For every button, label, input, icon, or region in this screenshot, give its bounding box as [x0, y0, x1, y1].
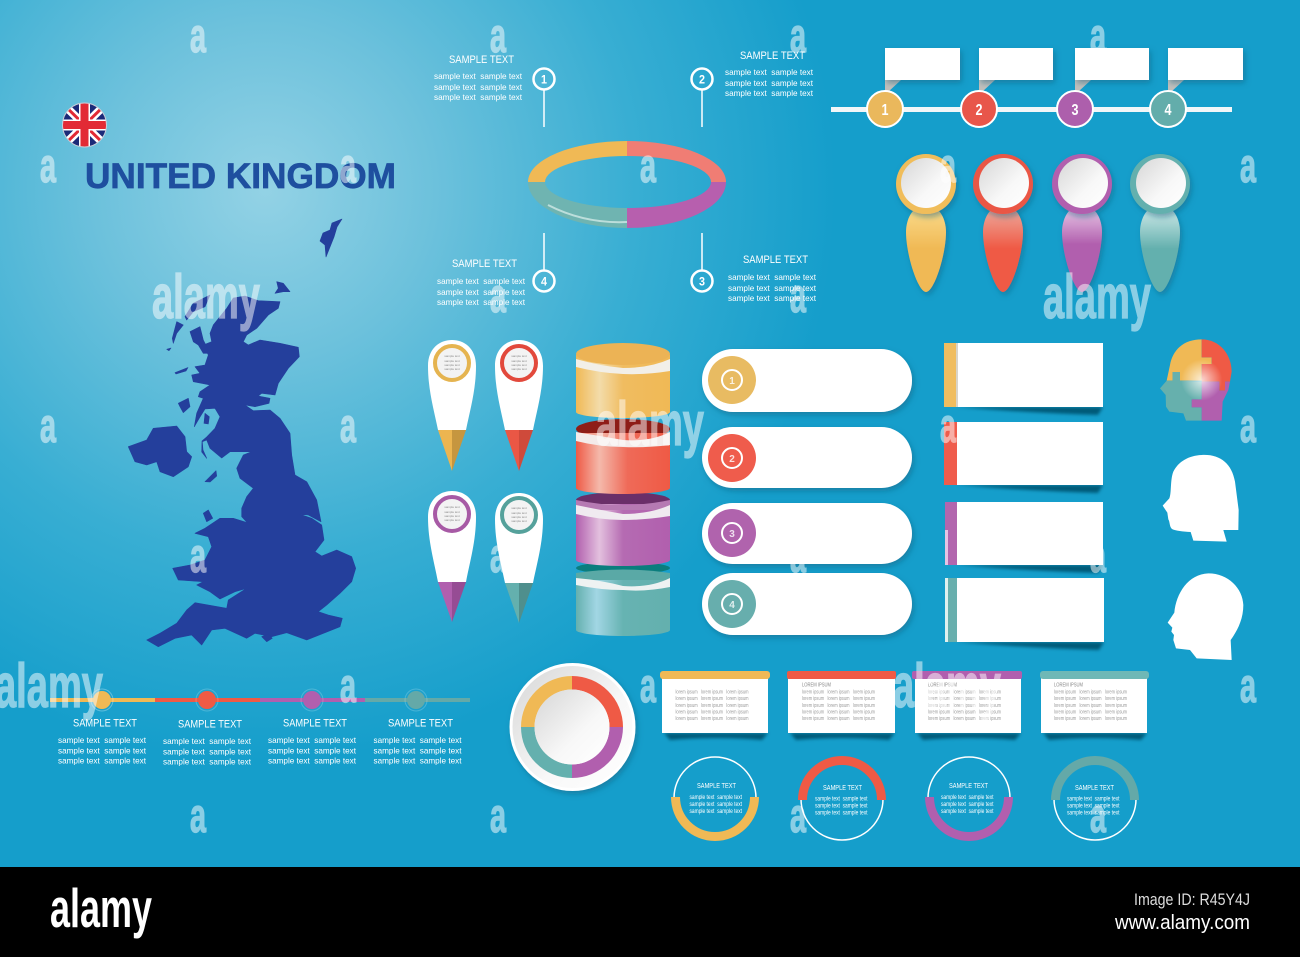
timeline step 4	[365, 689, 470, 766]
pin yellow: sample text	[444, 363, 460, 367]
panel: circle badge red: sample text sample text	[815, 796, 868, 802]
panel: lorem ipsum card 4: lorem ipsum lorem ipsum lorem ipsum	[1054, 703, 1127, 709]
timeline step 1	[50, 689, 155, 766]
panel: lorem ipsum card 4	[1040, 671, 1149, 740]
pin teal: sample text	[511, 511, 527, 515]
panel: lorem ipsum card 1: lorem ipsum lorem ipsum lorem ipsum	[676, 690, 748, 696]
watermarks: a	[1090, 530, 1106, 583]
watermarks: a	[790, 270, 806, 323]
panel: circle badge teal: SAMPLE TEXT	[1075, 785, 1115, 792]
panel: lorem ipsum card 4: lorem ipsum lorem ipsum lorem ipsum	[1054, 690, 1127, 696]
pin purple: sample text	[444, 510, 460, 514]
panel: lorem ipsum card 1: lorem ipsum lorem ipsum lorem ipsum	[676, 716, 748, 722]
timeline step 4: SAMPLE TEXT	[388, 718, 453, 730]
callout 3: SAMPLE TEXT	[743, 254, 808, 266]
pin teal	[495, 493, 543, 623]
panel: lorem ipsum card 2: lorem ipsum lorem ipsum lorem ipsum	[802, 696, 875, 702]
panel: circle badge purple: sample text sample text	[941, 809, 994, 815]
callout 3: 3	[699, 274, 705, 288]
step 3	[1057, 48, 1149, 127]
timeline step 1: sample text sample text	[58, 756, 147, 766]
panel: lorem ipsum card 1: lorem ipsum lorem ipsum lorem ipsum	[676, 696, 748, 702]
callout 2: sample text sample text	[725, 88, 814, 98]
panel: lorem ipsum card 3: lorem ipsum lorem ipsum lorem ipsum	[928, 710, 1001, 716]
watermarks: a	[790, 530, 806, 583]
ring segment 3	[627, 182, 726, 228]
panel: circle badge yellow: sample text sample text	[690, 809, 742, 815]
step 4: 4	[1164, 102, 1172, 119]
timeline step 3: SAMPLE TEXT	[283, 718, 347, 730]
watermarks: a	[490, 270, 506, 323]
timeline step 1: SAMPLE TEXT	[73, 718, 137, 730]
pin purple: sample text	[444, 514, 460, 518]
pin teal: sample text	[511, 519, 527, 523]
panel: donut chart	[511, 664, 634, 790]
watermarks: a	[340, 400, 356, 453]
pin purple	[428, 491, 476, 622]
watermarks: a	[1090, 10, 1106, 63]
callout 2	[692, 50, 814, 127]
watermarks: a	[40, 400, 56, 453]
callout 2: sample text sample text	[725, 78, 814, 88]
pill 3	[702, 503, 912, 564]
card 2	[944, 422, 1103, 493]
panel: ring diagram	[528, 141, 726, 228]
marker purple	[1052, 154, 1112, 292]
pill 1: 1	[729, 376, 735, 387]
step 1	[867, 48, 960, 127]
timeline step 4: sample text sample text	[374, 756, 462, 766]
callout 3	[692, 233, 817, 303]
pill 4	[702, 573, 912, 635]
marker yellow	[896, 154, 956, 292]
panel: lorem ipsum card 4: LOREM IPSUM	[1054, 682, 1083, 688]
pin purple: sample text	[444, 505, 460, 509]
callout 4: SAMPLE TEXT	[452, 258, 517, 270]
callout 1: 1	[541, 72, 547, 86]
ring segment 1	[528, 141, 627, 182]
step 2	[961, 48, 1053, 127]
watermarks: alamy	[152, 263, 260, 332]
panel: circle badge teal	[1054, 758, 1136, 840]
footer bar	[0, 867, 1300, 957]
step 4	[1150, 48, 1243, 127]
pin teal: sample text	[511, 515, 527, 519]
timeline step 1: sample text sample text	[58, 746, 147, 756]
callout 3: sample text sample text	[728, 272, 817, 282]
watermarks: a	[190, 530, 206, 583]
callout 4: sample text sample text	[437, 287, 526, 297]
donut segment teal	[521, 727, 572, 778]
pin red: sample text	[511, 363, 527, 367]
title: UNITED KINGDOM	[85, 157, 396, 196]
callout 1: SAMPLE TEXT	[449, 54, 514, 66]
callout 1: sample text sample text	[434, 92, 523, 102]
watermarks: a	[190, 790, 206, 843]
icon: union jack flag	[62, 102, 107, 148]
icon: male head silhouette	[1168, 573, 1243, 660]
timeline step 2: sample text sample text	[163, 756, 252, 766]
pill 2: 2	[729, 454, 735, 465]
pin red: sample text	[511, 367, 527, 371]
watermarks: alamy	[893, 652, 1001, 721]
cylinder red	[576, 419, 670, 494]
pin yellow: sample text	[444, 359, 460, 363]
timeline step 1: sample text sample text	[58, 735, 147, 745]
callout 4: 4	[541, 274, 547, 288]
watermarks: a	[790, 10, 806, 63]
pin yellow: sample text	[444, 354, 460, 358]
panel: circle badge yellow: SAMPLE TEXT	[697, 783, 737, 790]
watermarks: a	[190, 10, 206, 63]
callout 4	[437, 233, 554, 307]
panel: circle badge yellow	[674, 757, 756, 839]
icon: puzzle head	[1160, 339, 1232, 421]
watermarks: a	[1240, 400, 1256, 453]
panel: lorem ipsum card 4: lorem ipsum lorem ipsum lorem ipsum	[1054, 710, 1127, 716]
watermarks: a	[640, 660, 656, 713]
ring highlight	[548, 205, 627, 222]
watermarks: a	[1240, 660, 1256, 713]
panel: circle badge teal: sample text sample text	[1067, 796, 1120, 802]
panel: circle badge red: SAMPLE TEXT	[823, 785, 863, 792]
panel: circle badge red: sample text sample text	[815, 804, 868, 810]
watermarks: a	[1240, 140, 1256, 193]
panel: circle badge red	[801, 758, 883, 840]
timeline step 4: sample text sample text	[374, 735, 462, 745]
panel: lorem ipsum card 3: lorem ipsum lorem ipsum lorem ipsum	[928, 696, 1001, 702]
callout 4: sample text sample text	[437, 297, 526, 307]
puzzle piece yellow	[1167, 339, 1212, 381]
watermarks: a	[490, 790, 506, 843]
puzzle piece teal	[1160, 372, 1202, 421]
panel: lorem ipsum card 2	[787, 671, 896, 740]
panel: circle badge purple: SAMPLE TEXT	[949, 783, 989, 790]
watermarks: alamy	[596, 390, 704, 459]
panel: lorem ipsum card 3: lorem ipsum lorem ipsum lorem ipsum	[928, 703, 1001, 709]
pill 3: 3	[729, 529, 735, 540]
map: United Kingdom	[128, 219, 356, 647]
cylinder purple	[576, 492, 670, 566]
puzzle piece purple	[1192, 382, 1230, 421]
pill 4: 4	[729, 600, 735, 611]
map: Northern Ireland	[128, 426, 192, 477]
donut segment yellow	[521, 676, 572, 727]
callout 2: SAMPLE TEXT	[740, 50, 805, 62]
watermarks: a	[940, 140, 956, 193]
map: Great Britain	[147, 296, 356, 647]
panel: top-right numbered timeline	[831, 48, 1243, 127]
card 1	[944, 343, 1103, 415]
watermarks: a	[940, 400, 956, 453]
timeline step 4: sample text sample text	[374, 746, 462, 756]
pin red: sample text	[511, 354, 527, 358]
watermarks: a	[40, 140, 56, 193]
donut segment purple	[572, 727, 623, 778]
pin teal: sample text	[511, 506, 527, 510]
panel: circle badge teal: sample text sample text	[1067, 810, 1120, 816]
pin purple: sample text	[444, 518, 460, 522]
watermarks: alamy	[0, 652, 103, 721]
cylinder teal	[576, 562, 670, 636]
panel: lorem ipsum card 2: LOREM IPSUM	[802, 682, 831, 688]
panel: circle badge purple: sample text sample text	[941, 795, 994, 801]
watermarks: a	[490, 530, 506, 583]
panel: lorem ipsum card 3: lorem ipsum lorem ipsum lorem ipsum	[928, 716, 1001, 722]
marker red	[973, 154, 1033, 292]
callout 4: sample text sample text	[437, 276, 526, 286]
step 1: 1	[882, 102, 889, 119]
pill 2	[702, 427, 912, 488]
callout 3: sample text sample text	[728, 283, 817, 293]
timeline step 3: sample text sample text	[268, 735, 357, 745]
panel: lorem ipsum card 4: lorem ipsum lorem ipsum lorem ipsum	[1054, 716, 1127, 722]
timeline step 2: sample text sample text	[163, 736, 252, 746]
panel: lorem ipsum card 3	[912, 671, 1022, 740]
timeline step 2: SAMPLE TEXT	[178, 718, 242, 730]
callout 2: 2	[699, 72, 705, 86]
watermarks: a	[640, 140, 656, 193]
callout 1: sample text sample text	[434, 71, 523, 81]
panel: location pins	[428, 340, 543, 623]
panel: circle badge purple	[928, 757, 1010, 839]
callout 3: sample text sample text	[728, 293, 817, 303]
watermarks: a	[490, 10, 506, 63]
pin red: sample text	[511, 359, 527, 363]
panel: lorem ipsum card 3: LOREM IPSUM	[928, 682, 957, 688]
watermarks: a	[340, 660, 356, 713]
watermarks: a	[340, 140, 356, 193]
panel: rectangular cards with colour strip	[944, 343, 1104, 650]
ring segment 2	[627, 141, 726, 182]
panel: lorem ipsum card 1: lorem ipsum lorem ipsum lorem ipsum	[676, 703, 748, 709]
watermarks: a	[1090, 790, 1106, 843]
callout 1	[434, 54, 554, 127]
panel: circle badge red: sample text sample text	[815, 810, 868, 816]
panel: lorem ipsum card 1: lorem ipsum lorem ipsum lorem ipsum	[676, 710, 748, 716]
ring segment 4	[528, 182, 627, 228]
panel: lorem ipsum card 2: lorem ipsum lorem ipsum lorem ipsum	[802, 710, 875, 716]
card 4	[945, 578, 1104, 650]
icon: female head silhouette	[1163, 455, 1239, 542]
donut segment red	[572, 676, 623, 727]
pin red	[495, 340, 543, 471]
panel: circle badge yellow: sample text sample text	[690, 802, 742, 808]
panel: lorem ipsum card 2: lorem ipsum lorem ipsum lorem ipsum	[802, 690, 875, 696]
panel: lorem ipsum card 4: lorem ipsum lorem ipsum lorem ipsum	[1054, 696, 1127, 702]
cylinder yellow	[576, 343, 670, 418]
panel: circle badge yellow: sample text sample text	[690, 795, 742, 801]
panel: bottom-left timeline	[50, 689, 470, 766]
timeline step 2	[155, 689, 260, 766]
timeline step 3	[260, 689, 365, 766]
pin yellow	[428, 340, 476, 471]
card 3	[945, 502, 1103, 573]
timeline step 3: sample text sample text	[268, 746, 357, 756]
panel: lorem ipsum card 2: lorem ipsum lorem ipsum lorem ipsum	[802, 716, 875, 722]
timeline step 3: sample text sample text	[268, 756, 357, 766]
footer website: www.alamy.com	[1114, 912, 1250, 934]
puzzle piece red	[1202, 339, 1232, 391]
panel: stacked cylinders	[576, 343, 670, 636]
footer image id: Image ID: R45Y4J	[1134, 890, 1250, 909]
callout 2: sample text sample text	[725, 67, 814, 77]
step 3: 3	[1072, 102, 1079, 119]
panel: circle badge teal: sample text sample text	[1067, 804, 1120, 810]
panel: circle badge purple: sample text sample text	[941, 802, 994, 808]
marker teal	[1130, 154, 1190, 292]
panel: lorem ipsum card 3: lorem ipsum lorem ipsum lorem ipsum	[928, 690, 1001, 696]
timeline step 2: sample text sample text	[163, 746, 252, 756]
panel: lorem ipsum card 2: lorem ipsum lorem ipsum lorem ipsum	[802, 703, 875, 709]
watermarks: alamy	[1043, 263, 1151, 332]
pin yellow: sample text	[444, 367, 460, 371]
map: Scottish and other islands	[167, 219, 342, 642]
callout 1: sample text sample text	[434, 82, 523, 92]
panel: circle-and-drop markers	[896, 154, 1190, 292]
pill 1	[702, 349, 912, 412]
panel: lorem ipsum card 1	[660, 671, 770, 740]
watermarks: a	[790, 790, 806, 843]
panel: numbered pills	[702, 349, 912, 635]
step 2: 2	[976, 102, 983, 119]
footer logo: alamy	[50, 877, 152, 939]
